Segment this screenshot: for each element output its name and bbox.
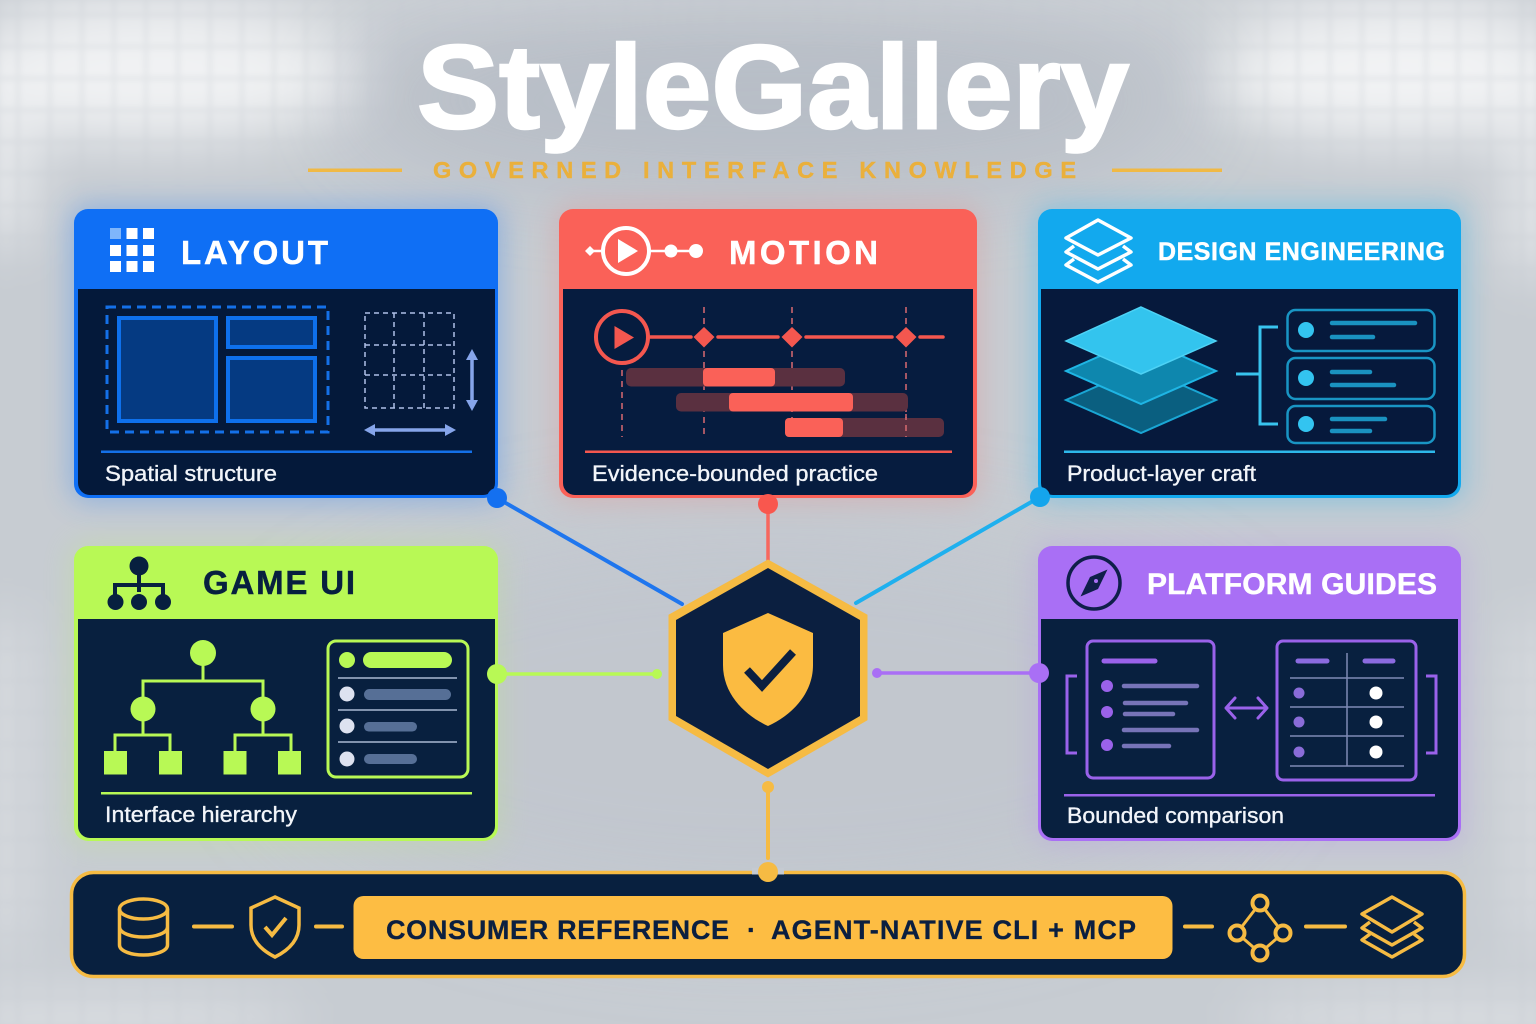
component list (1288, 310, 1434, 443)
icon: node graph (1230, 896, 1290, 960)
bracket left (1067, 676, 1077, 753)
panel: motion (555, 205, 981, 502)
label pill: AGENT-NATIVE CLI + MCP (771, 915, 1136, 945)
caption: Bounded comparison (1067, 803, 1284, 828)
comparison table (1277, 641, 1416, 780)
stacked layers (1066, 307, 1216, 433)
panel: design engineering (1034, 205, 1465, 502)
icon: layers (1066, 220, 1131, 282)
menu list (328, 641, 468, 777)
label pill: CONSUMER REFERENCE (386, 915, 729, 945)
connector: game ui (487, 664, 662, 684)
bottom bar (72, 862, 1464, 976)
panel: layout (70, 205, 502, 502)
icon: grid (110, 228, 154, 272)
document card (1087, 641, 1214, 778)
panel: game ui (70, 542, 502, 845)
title: StyleGallery (417, 21, 1129, 154)
icon: shield outline (251, 897, 299, 957)
caption: Interface hierarchy (105, 802, 297, 827)
connector node (758, 862, 778, 882)
grid diagram (365, 313, 454, 408)
heading: design engineering: DESIGN ENGINEERING (1158, 238, 1445, 266)
heading: game ui: GAME UI (203, 564, 355, 601)
connector lines to hub (487, 487, 1050, 858)
central hub: shield hexagon (669, 560, 867, 777)
connector: design engineering (856, 487, 1050, 603)
caption: Evidence-bounded practice (592, 461, 878, 486)
connector: platform guides (872, 663, 1049, 683)
panel: platform guides (1034, 542, 1465, 845)
icon: compass (1068, 557, 1120, 609)
heading: platform guides: PLATFORM GUIDES (1147, 568, 1437, 601)
heading: motion: MOTION (729, 234, 878, 271)
subtitle with side rules: GOVERNED INTERFACE KNOWLEDGE (433, 157, 1076, 183)
caption: Spatial structure (105, 461, 277, 486)
connector: motion (758, 494, 778, 560)
icon: shield check (723, 613, 813, 726)
connector: layout (487, 488, 682, 604)
caption: Product-layer craft (1067, 461, 1256, 486)
label pill (354, 896, 1172, 959)
icon: hierarchy (108, 556, 171, 610)
bracket connector (1236, 327, 1278, 424)
timeline chart (596, 307, 944, 437)
icon: playhead timeline (585, 228, 703, 274)
bracket right (1426, 676, 1436, 753)
tree diagram (104, 640, 301, 774)
label pill: · (747, 915, 756, 945)
arrow: compare (1226, 698, 1267, 718)
connector: consumer bar (762, 781, 774, 858)
icon: database (120, 899, 168, 955)
arrows: dimensions (364, 349, 478, 436)
icon: layers outline (1362, 897, 1422, 957)
heading: layout: LAYOUT (181, 234, 328, 271)
layout wireframe (107, 307, 328, 432)
